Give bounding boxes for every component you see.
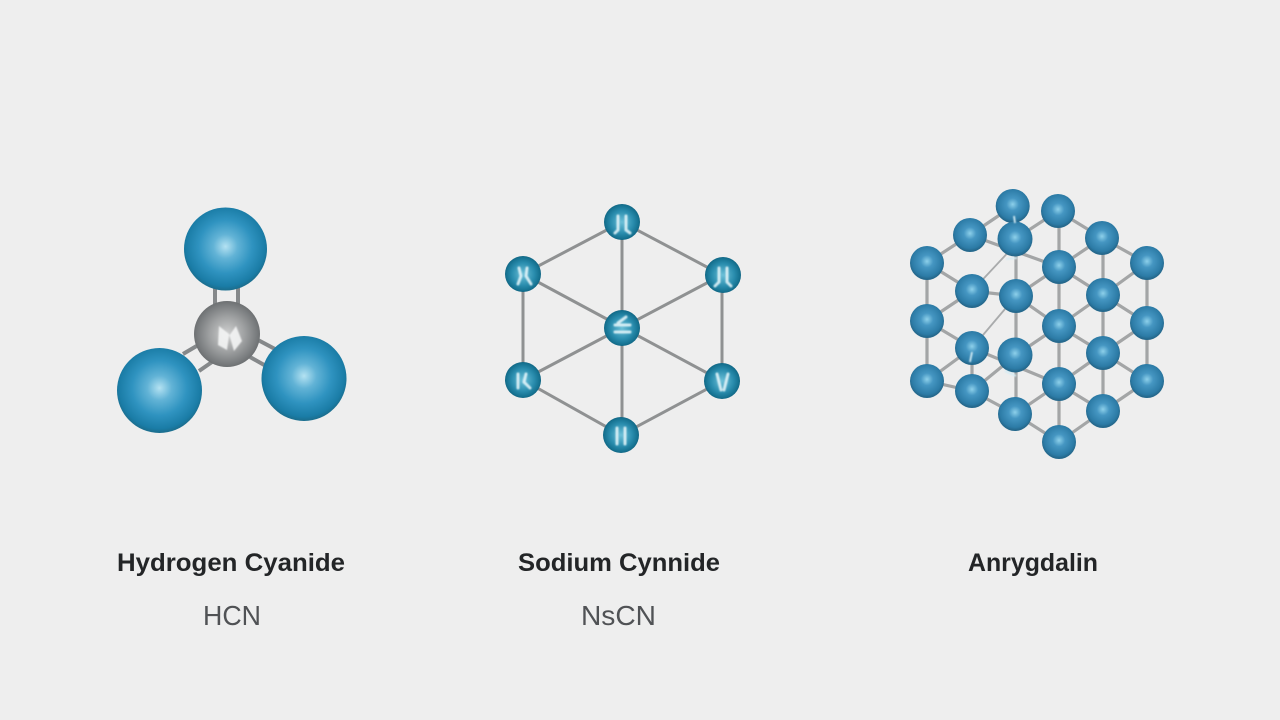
atom: left	[117, 348, 202, 433]
panel: hydrogen cyanide	[117, 208, 346, 631]
atoms	[910, 189, 1164, 459]
overlap glints	[970, 216, 1017, 376]
molecule: NaCN hexagonal lattice	[505, 204, 741, 453]
panel: amygdalin	[910, 189, 1164, 577]
atoms	[505, 204, 741, 453]
atom: right	[262, 336, 346, 421]
heading: hydrogen cyanide: Hydrogen Cyanide	[117, 549, 345, 577]
formula: HCN: HCN	[203, 600, 261, 631]
thin bonds	[972, 245, 1016, 348]
heading: sodium cyanide: Sodium Cynnide	[518, 549, 720, 577]
double bonds	[183, 285, 275, 371]
panel: sodium cyanide	[505, 204, 741, 631]
molecule: amygdalin lattice	[910, 189, 1164, 459]
atom: top	[184, 208, 267, 290]
bonds	[927, 206, 1147, 442]
atom: centre	[194, 301, 260, 367]
bonds	[523, 222, 722, 435]
atom highlights	[518, 216, 731, 444]
molecule: HCN ball and stick	[117, 208, 346, 433]
formula: NsCN: NsCN	[581, 600, 656, 631]
heading: amygdalin: Anrygdalin	[968, 549, 1098, 577]
